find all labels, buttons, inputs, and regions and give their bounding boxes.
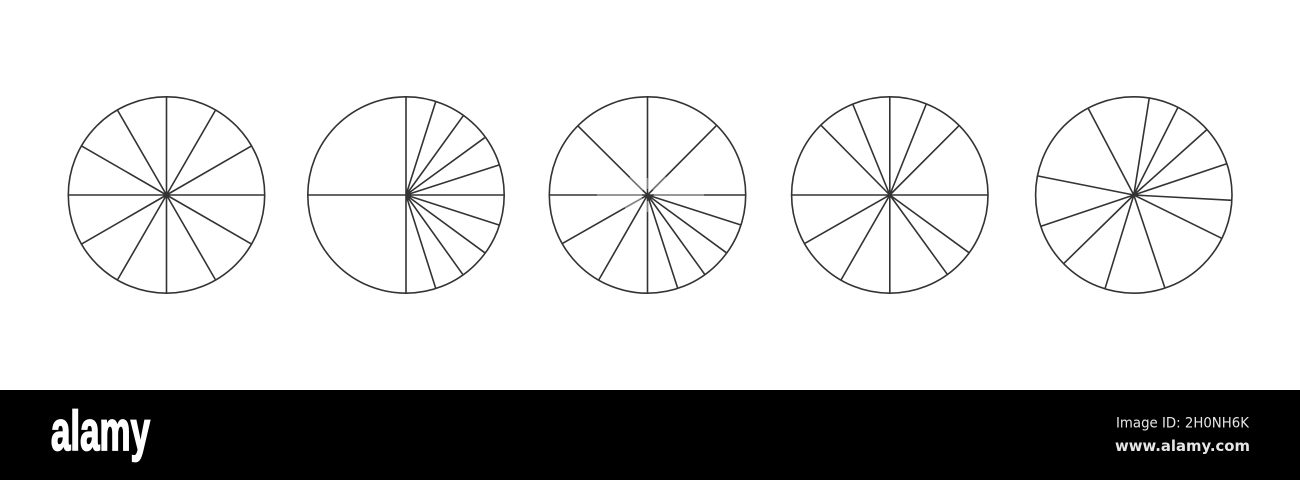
website address: www.alamy.com: [1115, 437, 1250, 455]
pie outline 3: mixed wide and narrow segments: [549, 97, 746, 293]
black footer band: [0, 390, 1300, 480]
image id: Image ID: 2H0NH6K: [1116, 415, 1249, 431]
pie outline 1: twelve equal segments: [68, 97, 265, 293]
pie outline 2: two quarters and ten narrow segments: [308, 97, 504, 293]
alamy logo: alamy: [51, 399, 150, 462]
pie outline 4: twelve uneven segments: [792, 97, 988, 293]
pie outline 5: rotated irregular segments: [1036, 97, 1232, 293]
